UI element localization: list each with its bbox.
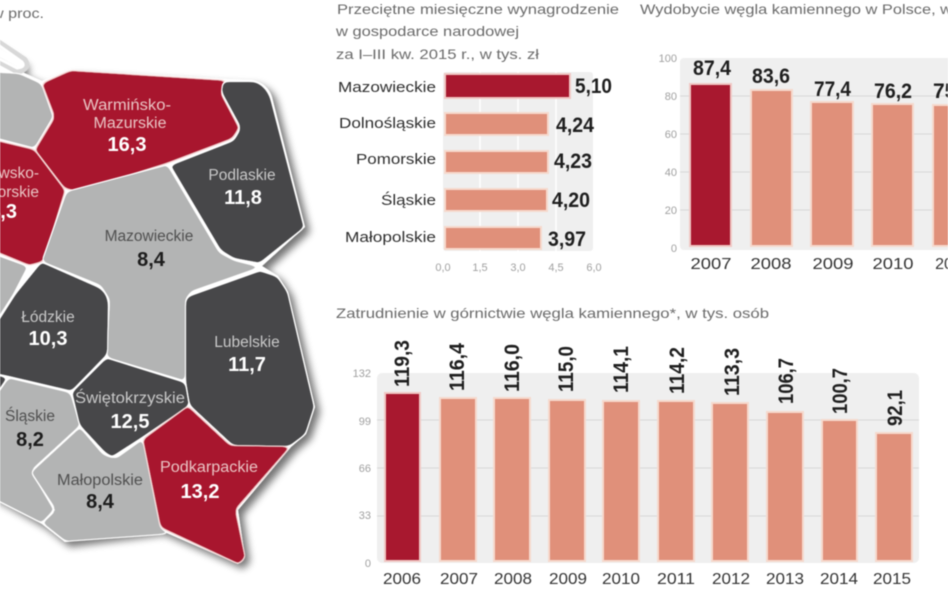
bar: 2013: 106,7 xyxy=(775,358,798,404)
icon: clipped coast loop xyxy=(0,40,26,71)
bar: 2009: 77,4 xyxy=(814,78,851,101)
bar: Pomorskie: 4,23 xyxy=(554,150,592,173)
map outline with shadow xyxy=(0,40,315,564)
bar: Mazowieckie: Mazowieckie xyxy=(338,79,436,96)
label: Podlaskie: Podlaskie xyxy=(208,167,276,184)
bar: Pomorskie xyxy=(356,150,592,173)
region: Podkarpackie xyxy=(142,405,292,565)
bar: 2011 cut off xyxy=(933,80,948,273)
y axis labels: 132 xyxy=(353,368,371,380)
bar: 2008: 83,6 xyxy=(752,65,790,88)
label: Podkarpackie xyxy=(160,459,258,503)
label: Małopolskie: 8,4 xyxy=(86,491,115,513)
region: Pomorskie xyxy=(0,71,54,149)
y axis labels: 60 xyxy=(665,129,677,141)
bar: Dolnośląskie xyxy=(339,113,594,137)
label: Lubelskie: Lubelskie xyxy=(214,334,280,351)
y axis labels xyxy=(353,368,371,570)
bar: 2010 xyxy=(602,346,640,588)
label: Lubelskie: 11,7 xyxy=(228,354,266,376)
label: Podkarpackie: Podkarpackie xyxy=(160,459,258,476)
chart: coal output bars xyxy=(659,53,948,273)
region: Świętokrzyskie xyxy=(71,357,190,458)
label: Warmińsko-Mazurskie: Mazurskie xyxy=(94,115,166,132)
bar: 2007: 87,4 xyxy=(693,57,731,80)
label: Kujawsko-Pomorskie xyxy=(0,165,39,223)
bar: Dolnośląskie: Dolnośląskie xyxy=(339,115,436,132)
y axis labels xyxy=(659,53,677,255)
heading: wages chart: Przeciętne miesięczne wynagrodzenie xyxy=(337,1,619,17)
label: Mazowieckie: Mazowieckie xyxy=(105,228,193,245)
bar: Śląskie: Śląskie xyxy=(381,191,436,209)
label: Śląskie: Śląskie xyxy=(5,407,55,425)
x axis labels xyxy=(435,262,602,274)
y axis labels: 0 xyxy=(671,243,677,255)
bar: 2009 xyxy=(549,346,587,588)
bar: 2007: 116,4 xyxy=(446,343,469,391)
label: Łódzkie: Łódzkie xyxy=(21,309,75,326)
bar: 2006: 2006 xyxy=(383,571,421,588)
heading: wages chart xyxy=(335,1,619,62)
bar: 2012: 2012 xyxy=(712,571,750,588)
bar: 2008: 116,0 xyxy=(501,344,524,392)
bar: 2015 xyxy=(873,390,912,588)
bar: 2007: 2007 xyxy=(440,571,478,588)
label: Podlaskie: 11,8 xyxy=(224,187,262,209)
label: Małopolskie: Małopolskie xyxy=(57,472,143,489)
x axis labels: 1,5 xyxy=(472,262,488,274)
region: Łódzkie xyxy=(0,261,109,392)
bar: 2011: 2011 xyxy=(657,571,695,588)
bar: Śląskie: 4,20 xyxy=(552,189,590,212)
bar: 2015: 92,1 xyxy=(884,390,907,426)
bar: 2014: 2014 xyxy=(820,571,858,588)
bar: 2014: 100,7 xyxy=(829,368,852,414)
label: Śląskie xyxy=(5,407,55,451)
region: Warmińsko-Mazurskie xyxy=(34,70,240,192)
bar: 2010: 2010 xyxy=(602,571,640,588)
bar: Mazowieckie: 5,10 xyxy=(575,75,612,98)
label: Podlaskie xyxy=(208,167,276,209)
label: Łódzkie: 10,3 xyxy=(29,328,67,350)
region: Wielkopolskie xyxy=(0,250,29,340)
chart: wages bars xyxy=(338,72,612,274)
bar: Małopolskie: Małopolskie xyxy=(345,229,436,246)
bar: 2007 xyxy=(690,57,732,273)
bar: 2014 xyxy=(820,368,858,588)
bar: Mazowieckie xyxy=(338,74,612,98)
bar: 2010: 114,1 xyxy=(610,346,633,393)
label: Świętokrzyskie: 12,5 xyxy=(111,411,149,433)
bar: 2009 xyxy=(811,78,854,273)
y axis labels: 80 xyxy=(665,91,677,103)
y axis labels: 20 xyxy=(665,205,677,217)
bar: 2011 xyxy=(657,347,695,588)
y axis labels: 66 xyxy=(359,463,371,475)
bar: 2007: 2007 xyxy=(690,256,732,273)
bar: Małopolskie: 3,97 xyxy=(548,228,586,251)
y axis labels: 40 xyxy=(665,167,677,179)
bar: 2012: 113,3 xyxy=(721,348,744,396)
label: Podkarpackie: 13,2 xyxy=(181,481,219,503)
x axis labels: 4,5 xyxy=(548,262,564,274)
y axis labels: 99 xyxy=(359,416,371,428)
map: unemployment by voivodeship xyxy=(0,40,315,565)
heading: wages chart: w gospodarce narodowej xyxy=(335,23,519,39)
bar: 2008: 2008 xyxy=(494,571,532,588)
label: Świętokrzyskie: Świętokrzyskie xyxy=(75,389,185,407)
label: Mazowieckie xyxy=(105,228,193,271)
bar: 2010 xyxy=(872,80,914,273)
label: Warmińsko-Mazurskie xyxy=(83,97,171,156)
bar: 2008: 2008 xyxy=(750,256,792,273)
bar: Pomorskie: Pomorskie xyxy=(356,151,436,168)
y axis labels: 0 xyxy=(365,558,371,570)
bar: 2010: 2010 xyxy=(872,256,914,273)
y axis labels: 33 xyxy=(359,510,371,522)
label: Małopolskie xyxy=(57,472,143,513)
heading: wages chart: za I–III kw. 2015 r., w tys. zł xyxy=(336,46,540,62)
x axis labels: 6,0 xyxy=(586,262,602,274)
label: Śląskie: 8,2 xyxy=(16,429,44,451)
bar: Śląskie xyxy=(381,189,590,212)
label: Warmińsko-Mazurskie: Warmińsko- xyxy=(83,97,171,114)
bar: Małopolskie xyxy=(345,227,586,251)
bar: 2013: 2013 xyxy=(766,571,804,588)
label: Łódzkie xyxy=(21,309,75,350)
chart: employment bars xyxy=(353,340,919,588)
bar: 2007 xyxy=(440,343,478,588)
region: Śląskie xyxy=(0,377,81,524)
bar: 2009: 2009 xyxy=(549,571,587,588)
bar: 2009: 115,0 xyxy=(555,346,578,392)
bar: 2008 xyxy=(750,65,792,273)
region: Kujawsko-Pomorskie xyxy=(0,137,66,266)
heading: coal output chart: Wydobycie węgla kamiennego w Polsce, w xyxy=(640,1,948,17)
label: Mazowieckie: 8,4 xyxy=(137,249,166,271)
bar: 2012 xyxy=(712,348,750,588)
label: Warmińsko-Mazurskie: 16,3 xyxy=(108,134,146,156)
region: Małopolskie xyxy=(30,426,174,542)
x axis labels: 3,0 xyxy=(510,262,526,274)
bar: 2006: 119,3 xyxy=(391,340,414,387)
region: Lubelskie xyxy=(185,270,315,447)
bar: 2010: 76,2 xyxy=(874,80,912,103)
bar: 2011: 114,2 xyxy=(666,347,689,394)
y axis labels: 100 xyxy=(659,53,677,65)
region: Podlaskie xyxy=(169,81,305,264)
x axis labels: 0,0 xyxy=(435,262,451,274)
bar: Dolnośląskie: 4,24 xyxy=(556,114,594,137)
region: Opolskie xyxy=(0,372,9,412)
region: Mazowieckie xyxy=(41,164,263,382)
heading: employment chart: Zatrudnienie w górnictwie węgla kamiennego*, w tys. osób xyxy=(336,305,769,321)
bar: 2008 xyxy=(494,344,532,588)
bar: 2013 xyxy=(766,358,804,588)
bar: 2009: 2009 xyxy=(812,256,854,273)
label: Lubelskie xyxy=(214,334,280,376)
bar: 2006 xyxy=(383,340,421,588)
bar: 2015: 2015 xyxy=(873,571,911,588)
label: Świętokrzyskie xyxy=(75,389,185,433)
